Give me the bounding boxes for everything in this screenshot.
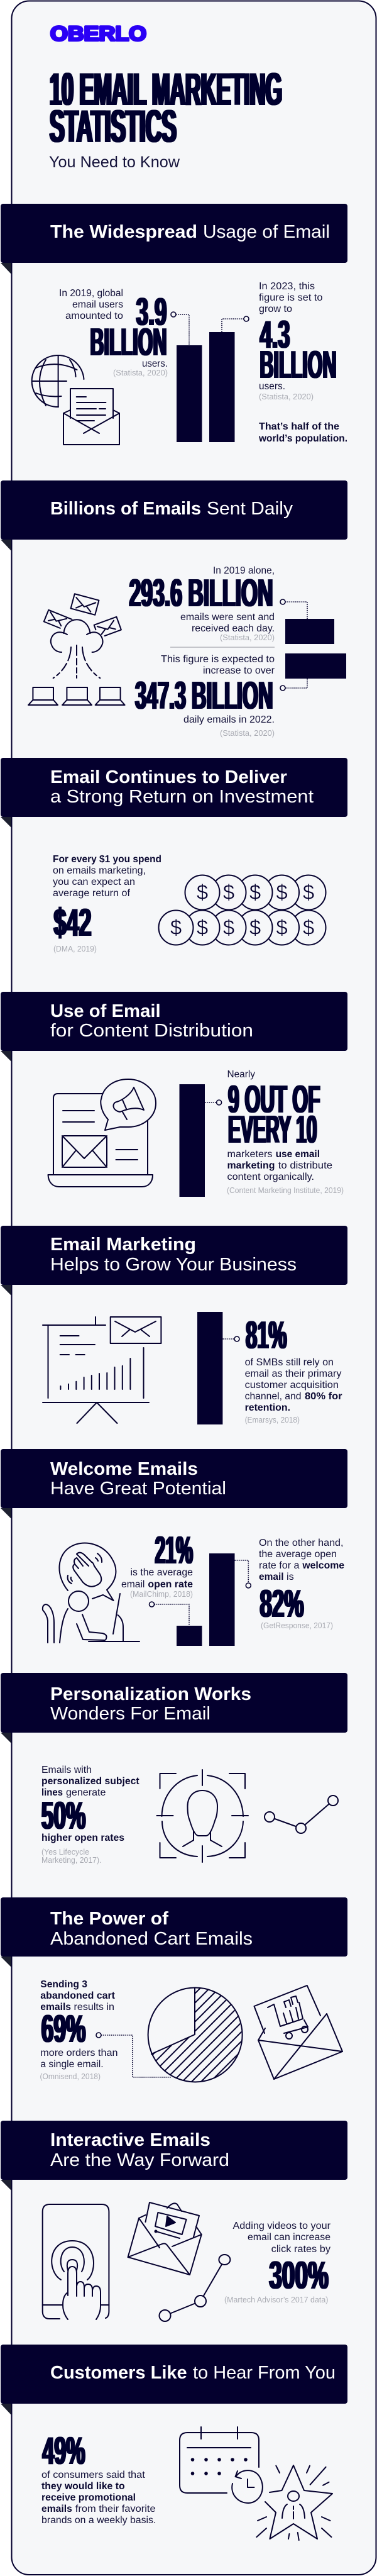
text: 2019 users: amounted to: [65, 311, 123, 321]
section header 9: Are the Way Forward: [50, 2150, 229, 2170]
text: 81% of SMBs: channel, and: [245, 1391, 302, 1402]
text: 2023 users: users.: [259, 381, 285, 392]
section header 1: The Widespread: [50, 222, 197, 242]
text: email volumes: [129, 565, 275, 738]
logo: Oberlo: OBERLO: [50, 23, 146, 45]
section header 5: Email Marketing: [50, 1235, 196, 1255]
text: 69% more orders: 69%: [41, 2007, 85, 2051]
section header 10: Customers Like: [50, 2363, 187, 2383]
text: 81% of SMBs: email as their primary: [245, 1368, 342, 1379]
section header 10: [1, 2345, 347, 2415]
icon: stacked dollar coins: $: [223, 880, 234, 904]
text: 82% welcome email: (GetResponse, 2017): [261, 1621, 333, 1630]
icon: person waving in speech bubble: [43, 1543, 139, 1643]
text: 21% open rate: (MailChimp, 2018): [130, 1589, 193, 1599]
section header 7: Personalization Works: [50, 1684, 251, 1704]
text: 2023 users: world’s population.: [258, 433, 347, 444]
section header 3: Email Continues to Deliver: [50, 767, 287, 787]
text: 69% more orders: more orders than: [40, 2048, 118, 2058]
icon: envelope with video: [128, 2202, 202, 2275]
icon: stacked dollar coins: $: [197, 916, 208, 939]
section header 5: [1, 1226, 347, 1296]
text: 81% of SMBs: of SMBs still rely on: [245, 1357, 334, 1368]
text: 2019 users: 3.9: [136, 290, 167, 334]
text: $42 return: average return of: [53, 888, 131, 899]
text: 21% open rate: is the average: [131, 1567, 193, 1578]
text: $42 return: [53, 854, 161, 953]
text: email volumes: This figure is expected to: [161, 654, 275, 665]
icon: stacked dollar coins: $: [249, 916, 261, 939]
section header 2: Billions of Emails: [50, 499, 201, 519]
section 2: billions of emails: [1, 480, 347, 738]
text: 9 out of every 10: use email: [276, 1149, 320, 1160]
icon: phone with touch gesture: [43, 2204, 109, 2319]
bar chart: 3.9 vs 4.3 billion: [171, 312, 249, 442]
text: 49% of consumers: 49%: [43, 2429, 85, 2473]
text: 81% of SMBs: 81%: [246, 1313, 287, 1357]
text: 49% of consumers: from their favorite: [75, 2504, 156, 2514]
subtitle: You Need to Know: [49, 153, 180, 171]
text: 50% higher open rates: [41, 1765, 139, 1865]
section 5: grow your business: [1, 1226, 347, 1424]
text: 69% more orders: Sending 3: [40, 1979, 87, 1990]
text: 82% welcome email: [259, 1538, 344, 1630]
section header 2: Sent Daily: [207, 499, 293, 519]
section 6: welcome emails: 21%: [155, 1528, 193, 1572]
text: 69% more orders: a single email.: [40, 2059, 104, 2070]
text: $42 return: For every $1 you spend: [53, 854, 161, 865]
text: email volumes: (Statista, 2020): [220, 728, 275, 738]
icon: stacked dollar coins: [158, 875, 325, 945]
text: email volumes: In 2019 alone,: [213, 565, 275, 576]
text: 81% of SMBs: 80% for: [305, 1391, 342, 1402]
text: 50% higher open rates: higher open rates: [41, 1833, 124, 1843]
section header 3: [1, 758, 347, 828]
section header 1: Usage of Email: [203, 222, 330, 242]
text: 50% higher open rates: (Yes Lifecycle: [41, 1847, 89, 1857]
section header 4: Use of Email: [50, 1001, 161, 1021]
icon: stacked dollar coins: $: [303, 916, 314, 939]
text: 69% more orders: abandoned cart: [40, 1990, 115, 2001]
text: $42 return: (DMA, 2019): [53, 944, 97, 953]
icon: line chart: [160, 2255, 230, 2321]
icon: hatched pie chart: [96, 1987, 243, 2083]
icon: line chart: [265, 1796, 338, 1833]
section header 10: to Hear From You: [193, 2363, 336, 2383]
text: $42 return: you can expect an: [53, 877, 135, 887]
text: 9 out of every 10: marketing: [227, 1160, 275, 1171]
text: email volumes: daily emails in 2022.: [183, 714, 275, 725]
section 6: welcome emails: [1, 1449, 347, 1646]
bar: 81%: [197, 1312, 239, 1424]
text: email volumes: increase to over: [203, 665, 275, 676]
text: 49% of consumers: brands on a weekly basis.: [41, 2515, 156, 2526]
section header 6: Have Great Potential: [50, 1479, 226, 1499]
icon: stacked dollar coins: $: [276, 880, 288, 904]
section header 3: a Strong Return on Investment: [50, 787, 314, 807]
section header 9: Interactive Emails: [50, 2130, 210, 2150]
text: 82% welcome email: email: [259, 1572, 284, 1582]
text: 82% welcome email: rate for a: [259, 1560, 300, 1571]
text: 49% of consumers: of consumers said that: [41, 2470, 146, 2480]
text: 50% higher open rates: lines: [41, 1787, 63, 1798]
section 7: personalization: [1, 1673, 347, 1865]
text: 300% click rates: 300%: [269, 2253, 329, 2297]
text: 50% higher open rates: Emails with: [41, 1765, 92, 1775]
text: 82% welcome email: is: [287, 1572, 294, 1582]
text: 49% of consumers: they would like to: [41, 2481, 125, 2492]
text: 81% of SMBs: [245, 1313, 342, 1424]
text: 82% welcome email: 82%: [260, 1582, 304, 1626]
text: 9 out of every 10: [227, 1069, 344, 1195]
icon: calendar with clock: [180, 2427, 263, 2503]
section header 4: [1, 992, 347, 1062]
text: 300% click rates: Adding videos to your: [232, 2221, 331, 2231]
text: 81% of SMBs: customer acquisition: [245, 1380, 339, 1391]
section header 9: [1, 2121, 347, 2190]
text: 2019 users: (Statista, 2020): [113, 368, 168, 377]
text: 69% more orders: results in: [74, 2002, 114, 2012]
text: email volumes: emails were sent and: [180, 612, 275, 623]
section 1: widespread usage: [1, 204, 347, 445]
text: 2023 users: (Statista, 2020): [259, 392, 314, 401]
bar chart: 21% vs 82%: [150, 1553, 251, 1646]
icon: laptop with email and megaphone: [48, 1079, 156, 1187]
text: 81% of SMBs: retention.: [245, 1402, 290, 1413]
text: 2023 users: That’s half of the: [259, 421, 339, 432]
text: 9 out of every 10: content organically.: [227, 1172, 314, 1182]
section header 7: [1, 1673, 347, 1743]
icon: star with person: [256, 2465, 332, 2540]
text: 2019 users: [59, 288, 168, 377]
text: $42 return: $42: [54, 901, 92, 945]
text: 300% click rates: email can increase: [248, 2232, 331, 2243]
section header 8: Abandoned Cart Emails: [50, 1929, 253, 1949]
text: 21% open rate: [121, 1528, 193, 1599]
icon: envelope with shopping cart: [254, 1985, 342, 2079]
text: 2019 users: users.: [142, 358, 168, 369]
section header 5: Helps to Grow Your Business: [50, 1255, 297, 1275]
icon: stacked dollar coins: $: [223, 916, 234, 939]
text: 82% welcome email: On the other hand,: [259, 1538, 343, 1548]
text: 69% more orders: (Omnisend, 2018): [40, 2072, 101, 2081]
icon: presentation board with envelope: [43, 1317, 161, 1423]
text: 69% more orders: [40, 1979, 118, 2081]
section 4: content distribution: [1, 992, 347, 1197]
text: 69% more orders: emails: [40, 2002, 71, 2012]
text: 9 out of every 10: (Content Marketing Institute, 2019): [227, 1185, 344, 1195]
section header 6: [1, 1449, 347, 1519]
icon: stacked dollar coins: $: [197, 880, 208, 904]
text: 50% higher open rates: personalized subject: [41, 1776, 139, 1787]
text: 81% of SMBs: (Emarsys, 2018): [245, 1415, 300, 1424]
section 1: widespread usage: BILLION: [90, 320, 167, 364]
text: 50% higher open rates: 50%: [41, 1794, 85, 1838]
text: 49% of consumers: receive promotional: [41, 2492, 136, 2503]
text: 21% open rate: email: [121, 1579, 145, 1590]
text: 2023 users: In 2023, this: [259, 281, 315, 292]
text: 82% welcome email: welcome: [302, 1560, 344, 1571]
section header 8: [1, 1897, 347, 1967]
icon: cloud, envelopes and laptops: [28, 594, 125, 705]
text: 49% of consumers: emails: [41, 2504, 72, 2514]
icon: stacked dollar coins: $: [249, 880, 261, 904]
section 10: customers like: [1, 2345, 347, 2540]
section header 2: [1, 480, 347, 551]
text: 2019 users: In 2019, global: [59, 288, 123, 299]
section header 1: [1, 204, 347, 274]
text: 2023 users: grow to: [259, 304, 292, 314]
bar: 9 out of 10: [180, 1084, 222, 1197]
icon: globe and envelope: [32, 355, 119, 445]
text: 2019 users: email users: [72, 299, 123, 310]
text: 2023 users: 4.3: [260, 313, 290, 357]
text: 50% higher open rates: generate: [66, 1787, 106, 1798]
section 3: return on investment: [1, 758, 347, 953]
section header 6: Welcome Emails: [50, 1459, 198, 1479]
section 9: interactive emails: [1, 2121, 347, 2321]
text: 9 out of every 10: to distribute: [278, 1160, 332, 1171]
text: 300% click rates: [224, 2221, 331, 2304]
text: 300% click rates: (Martech Advisor’s 2017 data): [224, 2295, 328, 2304]
section header 7: Wonders For Email: [50, 1704, 210, 1724]
text: 49% of consumers: [41, 2429, 156, 2526]
section header 8: The Power of: [50, 1909, 168, 1929]
icon: stacked dollar coins: $: [303, 880, 314, 904]
bar chart: daily emails: [280, 599, 346, 691]
text: email volumes: received each day.: [192, 623, 275, 634]
text: 2023 users: figure is set to: [259, 292, 323, 303]
text: 9 out of every 10: marketers: [227, 1149, 273, 1160]
text: 50% higher open rates: Marketing, 2017).: [41, 1855, 102, 1865]
section header 4: for Content Distribution: [50, 1021, 253, 1041]
icon: stacked dollar coins: $: [170, 916, 182, 939]
title: [50, 64, 282, 152]
icon: face recognition target: [157, 1770, 248, 1862]
section 8: abandoned cart: [1, 1897, 347, 2088]
text: 21% open rate: open rate: [148, 1579, 193, 1590]
text: 2023 users: [258, 281, 347, 444]
text: 82% welcome email: the average open: [259, 1549, 337, 1560]
text: 300% click rates: click rates by: [271, 2244, 331, 2255]
text: $42 return: on emails marketing,: [53, 865, 146, 876]
icon: stacked dollar coins: $: [276, 916, 288, 939]
text: 9 out of every 10: Nearly: [227, 1069, 255, 1080]
title: STATISTICS: [50, 101, 177, 152]
text: email volumes: (Statista, 2020): [220, 633, 275, 642]
